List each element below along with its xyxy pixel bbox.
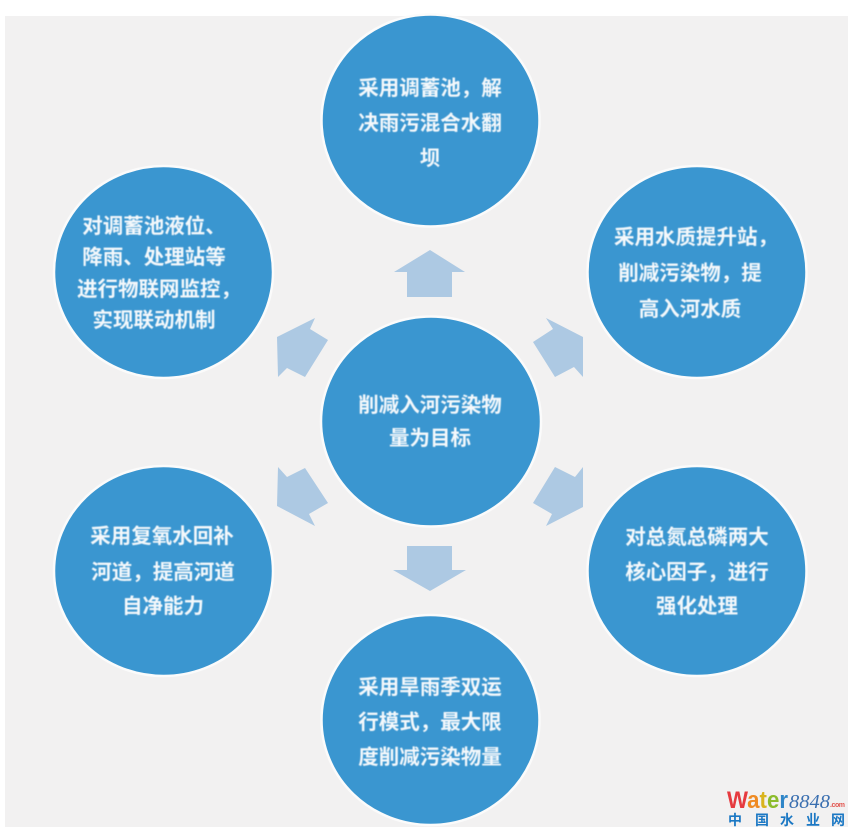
- circle: lower right, nitrogen and phosphorus: [588, 466, 806, 676]
- watermark logo: 中: [728, 812, 742, 828]
- circle: upper right, lift station: 削减污染物，提: [618, 262, 762, 285]
- watermark logo: [727, 787, 845, 828]
- circle: top, storage tank: 坝: [420, 147, 440, 170]
- arrow: lower right: [533, 467, 583, 526]
- circle: top, storage tank: 采用调蓄池，解: [358, 77, 502, 100]
- circle: lower left, reoxygenated water: 采用复氧水回补: [90, 524, 234, 548]
- circle: lower right, nitrogen and phosphorus: 对总氮总磷两大: [625, 526, 769, 549]
- watermark logo: 业: [806, 812, 820, 828]
- watermark logo: 8848: [789, 791, 830, 813]
- circle: top, storage tank: [322, 14, 540, 226]
- watermark logo: 国: [755, 812, 769, 828]
- circle: bottom, dual operation mode: [322, 615, 540, 825]
- circle: upper left, IoT monitoring: 对调蓄池液位、: [82, 214, 226, 238]
- circle: bottom, dual operation mode: 度削减污染物量: [358, 746, 502, 769]
- circle: upper left, IoT monitoring: [54, 166, 273, 378]
- circle: upper right, lift station: 采用水质提升站，: [614, 226, 778, 249]
- circle: upper left, IoT monitoring: 降雨、处理站等: [82, 246, 226, 269]
- circle: upper right, lift station: 高入河水质: [639, 297, 741, 321]
- watermark logo: 网: [831, 812, 845, 828]
- arrow: down: [393, 546, 466, 591]
- circle: top, storage tank: 决雨污混合水翻: [358, 112, 502, 135]
- circle: center goal: [321, 316, 541, 526]
- circle: upper left, IoT monitoring: 实现联动机制: [92, 308, 216, 332]
- circle: upper right, lift station: [588, 166, 806, 378]
- circle: upper left, IoT monitoring: 进行物联网监控，: [77, 278, 241, 301]
- arrow: upper right: [533, 318, 583, 377]
- circle: center goal: 量为目标: [389, 427, 471, 450]
- watermark logo: 水: [780, 812, 794, 828]
- arrow: upper left: [277, 318, 328, 377]
- circle: lower right, nitrogen and phosphorus: 核心因子，进行: [625, 560, 769, 584]
- circle: lower right, nitrogen and phosphorus: 强化处理: [656, 595, 738, 618]
- arrow: up: [394, 250, 465, 297]
- circle: center goal: 削减入河污染物: [358, 394, 502, 417]
- arrow: lower left: [277, 467, 328, 526]
- circle: bottom, dual operation mode: 行模式，最大限: [358, 711, 502, 734]
- watermark logo: .com: [830, 802, 845, 809]
- watermark logo: Water: [727, 787, 788, 814]
- circle: lower left, reoxygenated water: [54, 466, 273, 676]
- circle: bottom, dual operation mode: 采用旱雨季双运: [358, 676, 502, 699]
- circle: lower left, reoxygenated water: 河道，提高河道: [91, 560, 235, 584]
- circle: lower left, reoxygenated water: 自净能力: [122, 595, 204, 618]
